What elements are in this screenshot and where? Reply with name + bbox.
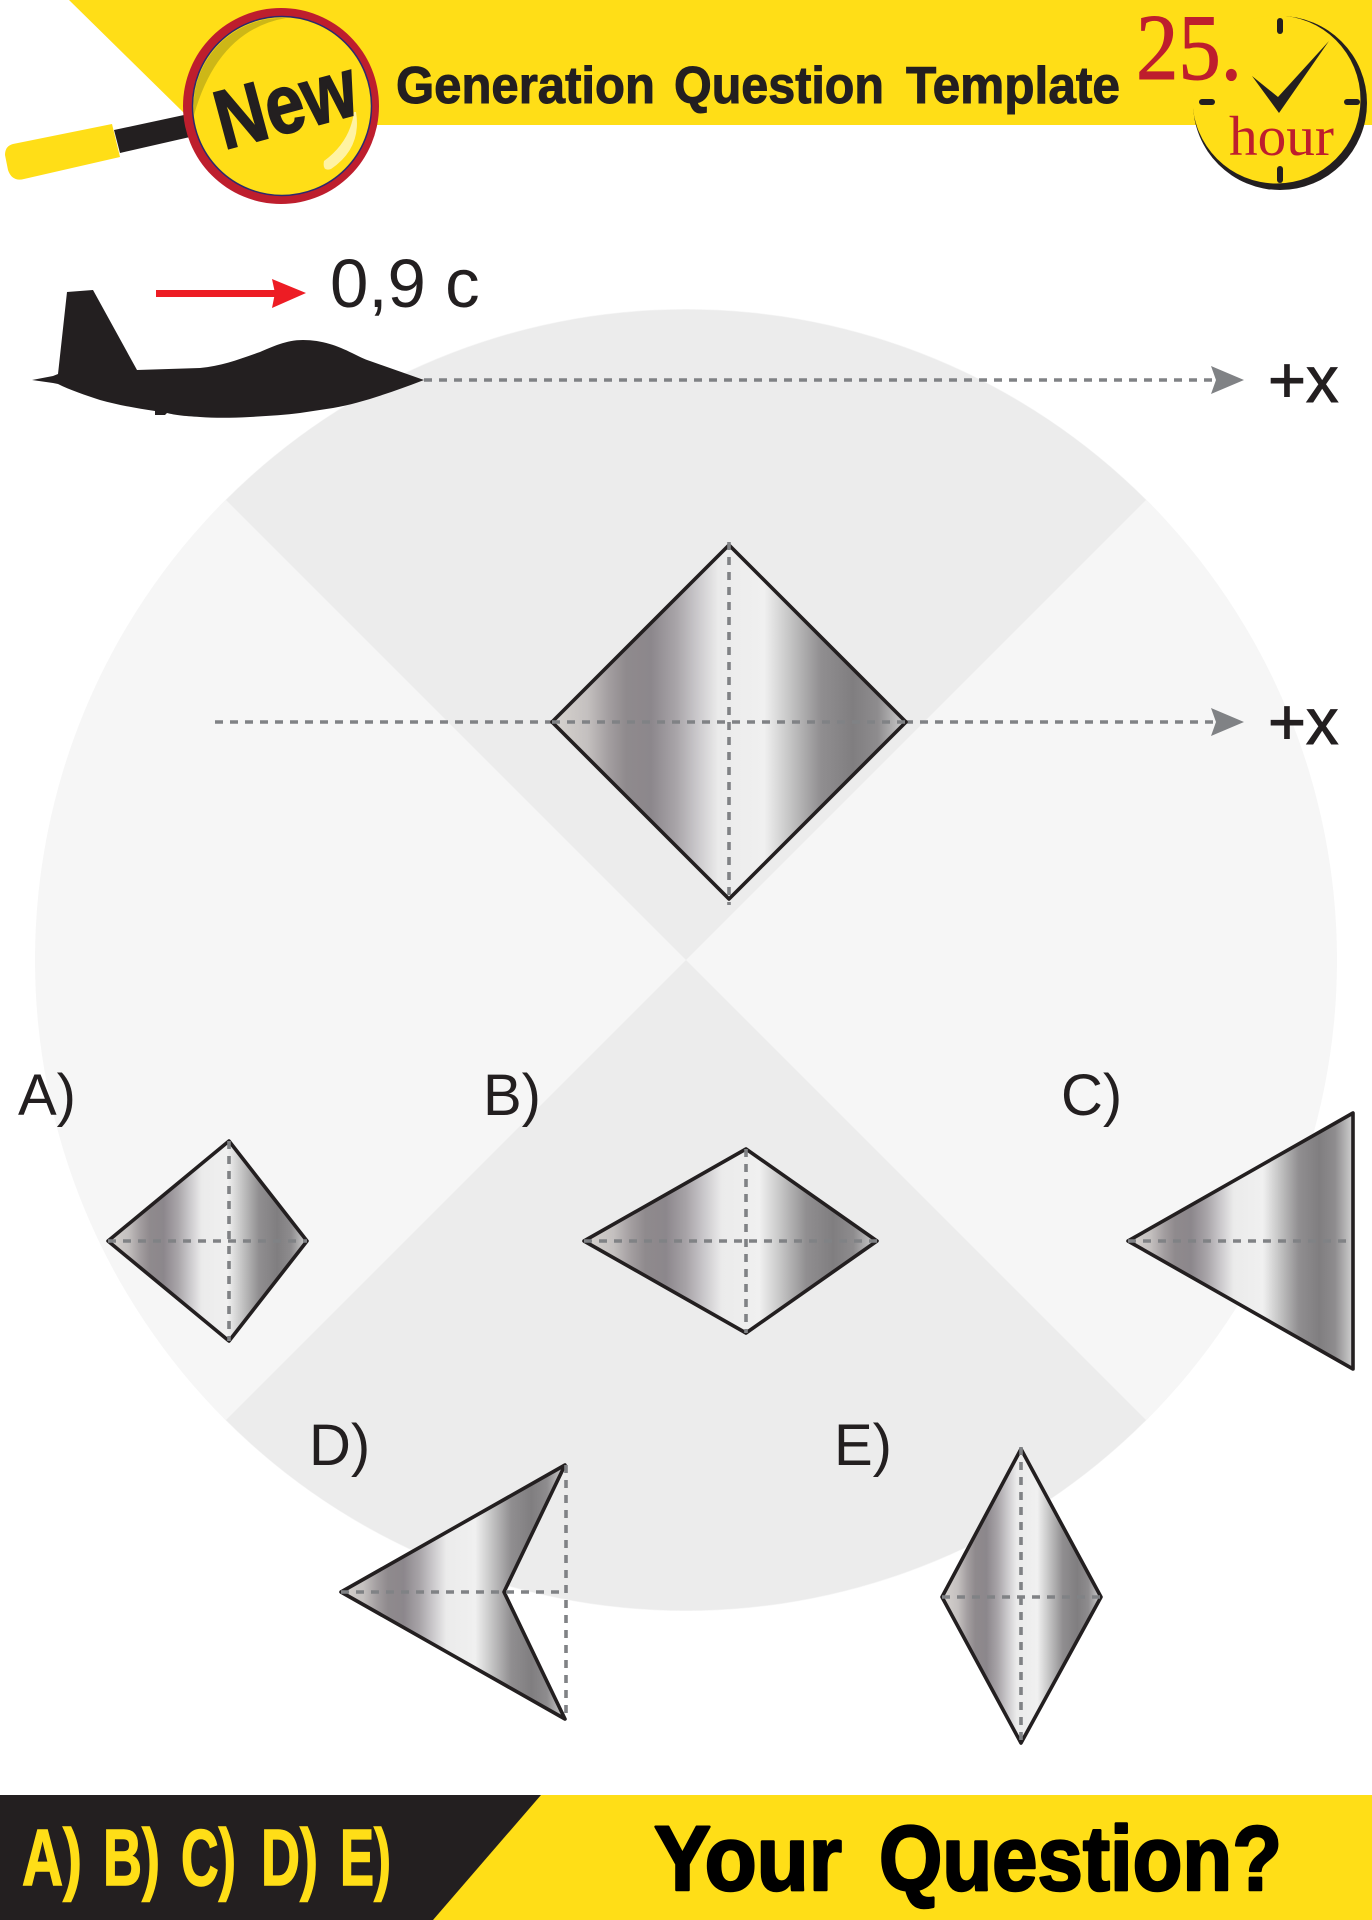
header title — [396, 57, 1120, 115]
option B label: B) — [483, 1063, 541, 1128]
hour label: hour — [1229, 106, 1334, 168]
New label: New — [204, 39, 367, 167]
check mark — [1252, 41, 1329, 113]
footer banner — [0, 1795, 1372, 1920]
footer answer options: C) — [181, 1813, 236, 1902]
lens shadow — [194, 18, 286, 115]
magnifier grip — [5, 124, 120, 180]
icon: magnifying glass with New — [5, 8, 379, 204]
icon: 25th hour clock — [1136, 0, 1367, 190]
footer answer options: D) — [261, 1813, 318, 1902]
header title: Question — [674, 57, 884, 115]
option D label: D) — [309, 1413, 370, 1478]
option E label: E) — [834, 1413, 892, 1478]
lens highlight — [324, 112, 357, 170]
footer answer options: B) — [103, 1813, 160, 1902]
main x axis — [215, 708, 1244, 736]
option C shape — [1128, 1113, 1353, 1369]
footer answer options — [22, 1813, 391, 1902]
option A label: A) — [18, 1063, 76, 1128]
header title: Template — [906, 57, 1120, 115]
footer answer options: E) — [340, 1813, 391, 1902]
icon: jet silhouette — [32, 290, 424, 418]
option C label: C) — [1061, 1063, 1122, 1128]
main axis label: +x — [1268, 685, 1338, 758]
footer question: Question? — [879, 1808, 1282, 1910]
option B shape — [584, 1149, 877, 1333]
footer question: Your — [654, 1808, 842, 1910]
option E shape — [942, 1447, 1101, 1746]
jet x axis — [424, 366, 1244, 394]
magnifier handle — [114, 115, 190, 153]
velocity label: 0,9 c — [330, 245, 480, 322]
jet axis label: +x — [1268, 343, 1338, 416]
footer answer options: A) — [22, 1813, 82, 1902]
clock face — [1193, 16, 1367, 190]
header title: Generation — [396, 57, 655, 115]
footer question — [654, 1808, 1282, 1910]
main square shape — [552, 542, 906, 905]
background circle with four sectors — [35, 309, 1337, 1611]
option D shape — [341, 1465, 566, 1719]
magnifier lens — [183, 8, 379, 204]
velocity arrow — [156, 279, 306, 308]
clock ticks — [1202, 21, 1357, 180]
option A shape — [108, 1141, 307, 1341]
header banner — [69, 0, 1372, 125]
